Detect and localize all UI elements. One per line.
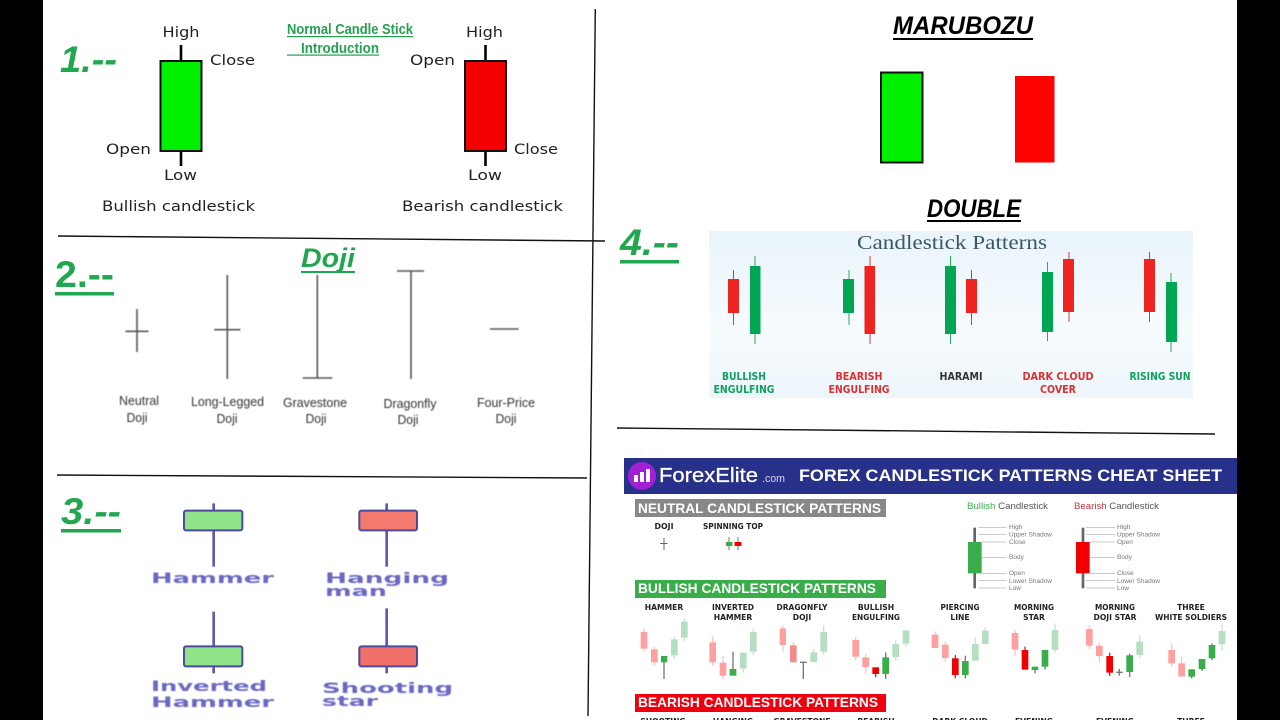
legend: bullish candlestick anatomy: Bullish Candlestick <box>967 501 1048 512</box>
legend: bullish candlestick anatomy: High <box>1009 524 1023 531</box>
legend: bearish candlestick anatomy: Open <box>1117 539 1133 546</box>
bearish candlestick diagram: High <box>466 25 503 41</box>
legend: bearish candlestick anatomy: Low <box>1117 585 1129 592</box>
pattern: bullish engulfing: BULLISH <box>722 371 766 383</box>
bullish candlestick diagram: Low <box>164 168 197 184</box>
legend: bearish candlestick anatomy: Lower Shadow <box>1117 578 1160 585</box>
bullish pattern names: LINE <box>950 613 970 622</box>
section: bearish candlestick patterns: BEARISH CANDLESTICK PATTERNS <box>638 694 878 710</box>
chart: morning star <box>1012 623 1058 673</box>
red marubozu candle <box>1015 76 1054 162</box>
bullish candlestick diagram <box>102 25 256 215</box>
mini charts right: piercing line, morning star, morning doji star, three white soldiers <box>932 623 1225 678</box>
green marubozu candle <box>881 72 922 162</box>
hammer labels: man <box>325 584 387 600</box>
pattern: rising sun: RISING SUN <box>1130 371 1190 383</box>
pattern: bearish engulfing: BEARISH <box>836 371 882 383</box>
pattern: dark cloud cover: COVER <box>1040 384 1076 396</box>
chart: inverted hammer <box>709 629 757 679</box>
number 1: 1.-- <box>60 39 117 80</box>
candlestick patterns chart <box>709 231 1193 398</box>
legend: bullish candlestick anatomy <box>967 501 1052 592</box>
doji labels: Gravestone <box>283 395 347 410</box>
bullish pattern names: HAMMER <box>645 603 683 612</box>
bullish pattern names: WHITE SOLDIERS <box>1155 613 1227 622</box>
chart: piercing line <box>932 627 989 678</box>
legend: bearish candlestick anatomy <box>1074 501 1160 592</box>
pattern: dark cloud cover <box>1022 252 1094 396</box>
doji labels: Dragonfly <box>384 396 437 411</box>
bullish pattern names: DOJI <box>793 613 811 622</box>
hammer candle set <box>184 503 417 673</box>
section: neutral candlestick patterns: DOJI <box>654 522 674 531</box>
pattern: bullish engulfing <box>714 256 774 396</box>
panel 4: double candlestick patterns <box>619 195 1193 398</box>
panel: forex candlestick cheat sheet <box>624 458 1237 720</box>
chart: hammer <box>641 618 688 679</box>
heading: doji: Doji <box>301 243 356 273</box>
bullish pattern names: DOJI STAR <box>1094 613 1137 622</box>
section: bullish candlestick patterns: BULLISH CANDLESTICK PATTERNS <box>638 580 876 596</box>
section: neutral candlestick patterns: NEUTRAL CANDLESTICK PATTERNS <box>638 500 881 516</box>
pattern: bearish engulfing: ENGULFING <box>828 384 890 396</box>
doji labels: Doji <box>126 410 148 425</box>
bullish pattern names: HAMMER <box>714 613 752 622</box>
bullish pattern names: DRAGONFLY <box>776 603 828 612</box>
candlestick patterns chart: Candlestick Patterns <box>857 232 1047 254</box>
bullish candlestick diagram: Close <box>210 53 255 69</box>
bearish candlestick diagram: Low <box>468 168 502 184</box>
bearish candlestick diagram: Open <box>410 53 455 69</box>
panel 1: normal candlestick introduction <box>60 22 564 215</box>
bullish pattern names: ENGULFING <box>852 613 900 622</box>
bullish candlestick diagram: Open <box>106 142 151 158</box>
legend: bearish candlestick anatomy: Close <box>1117 570 1134 577</box>
heading: normal candle stick introduction: Introduction <box>301 41 379 57</box>
chart: three white soldiers <box>1168 624 1225 678</box>
hammer labels: Hammer <box>151 695 274 711</box>
banner: FOREX CANDLESTICK PATTERNS CHEAT SHEET <box>799 466 1223 485</box>
legend: bearish candlestick anatomy: Body <box>1117 554 1133 561</box>
heading: normal candle stick introduction: Normal Candle Stick <box>287 22 414 38</box>
legend: bullish candlestick anatomy: Lower Shadow <box>1009 578 1052 585</box>
legend: bearish candlestick anatomy: Bearish Candlestick <box>1074 501 1159 512</box>
bullish pattern names: STAR <box>1023 613 1045 622</box>
number 2: 2.-- <box>55 254 114 295</box>
bullish pattern names: MORNING <box>1095 603 1135 612</box>
hammer labels: star <box>322 694 378 710</box>
chart: morning doji star <box>1086 626 1143 677</box>
bullish candlestick diagram: Bullish candlestick <box>102 199 256 215</box>
bullish pattern names: PIERCING <box>940 603 980 612</box>
bearish candlestick diagram: Close <box>514 142 558 158</box>
bearish candlestick diagram: Bearish candlestick <box>402 199 564 215</box>
pattern: rising sun <box>1130 252 1190 383</box>
pattern: harami: HARAMI <box>940 371 982 383</box>
banner: .com <box>762 473 785 485</box>
chart: dragonfly doji <box>780 625 827 679</box>
section: bearish candlestick patterns <box>635 694 1205 720</box>
banner <box>624 458 1237 494</box>
banner: ForexElite <box>659 465 758 487</box>
hammer labels: Hammer <box>151 571 274 587</box>
bullish candlestick diagram: High <box>162 25 200 41</box>
bullish pattern names: INVERTED <box>712 603 754 612</box>
hammer labels <box>151 571 453 711</box>
legend: bullish candlestick anatomy: Upper Shadow <box>1009 532 1052 538</box>
hammer labels: Inverted <box>151 679 267 695</box>
doji labels: Four-Price <box>477 395 535 410</box>
bullish pattern names: MORNING <box>1014 603 1054 612</box>
hammer labels: Shooting <box>322 681 453 697</box>
bullish pattern names: THREE <box>1177 603 1205 612</box>
heading: double: DOUBLE <box>927 195 1022 223</box>
doji symbols <box>126 271 518 379</box>
legend: bearish candlestick anatomy: High <box>1117 524 1131 531</box>
doji labels: Doji <box>496 411 517 426</box>
doji labels: Neutral <box>119 393 159 408</box>
pattern: dark cloud cover: DARK CLOUD <box>1022 371 1094 383</box>
panel 2: doji <box>55 243 535 427</box>
doji labels: Doji <box>216 411 238 426</box>
bearish candlestick diagram <box>402 25 564 215</box>
legend: bullish candlestick anatomy: Open <box>1009 570 1025 577</box>
bearish pattern names, cut off at page edge <box>640 717 1205 720</box>
section: neutral candlestick patterns <box>635 499 886 550</box>
doji labels: Doji <box>306 411 327 426</box>
heading: normal candle stick introduction <box>287 22 414 57</box>
bullish pattern names: BULLISH <box>858 603 894 612</box>
pattern: bearish engulfing <box>828 256 890 396</box>
doji labels <box>119 393 535 427</box>
number 3: 3.-- <box>61 491 121 532</box>
doji labels: Long-Legged <box>191 394 264 409</box>
legend: bullish candlestick anatomy: Close <box>1009 539 1026 546</box>
chart: bullish engulfing <box>852 630 909 679</box>
bullish pattern names <box>645 603 1227 622</box>
icon: spinning top <box>726 537 742 550</box>
icon: doji <box>660 538 668 550</box>
mini charts left: hammer, inverted hammer, dragonfly doji, bullish engulfing <box>641 618 909 679</box>
number 4: 4.-- <box>619 222 679 263</box>
heading: marubozu: MARUBOZU <box>893 12 1034 40</box>
icon: forexelite logo <box>628 462 656 490</box>
legend: bullish candlestick anatomy: Body <box>1009 554 1025 561</box>
legend: bearish candlestick anatomy: Upper Shadow <box>1117 532 1160 538</box>
hammer labels: Hanging <box>325 571 449 587</box>
panel: marubozu <box>881 12 1054 162</box>
doji labels: Doji <box>398 412 419 427</box>
pattern: harami <box>940 256 982 383</box>
section: neutral candlestick patterns: SPINNING TOP <box>703 522 763 531</box>
pattern: bullish engulfing: ENGULFING <box>714 384 774 396</box>
legend: bullish candlestick anatomy: Low <box>1009 585 1021 592</box>
panel 3: hammer family <box>61 491 453 711</box>
section: bullish candlestick patterns <box>635 580 1227 679</box>
